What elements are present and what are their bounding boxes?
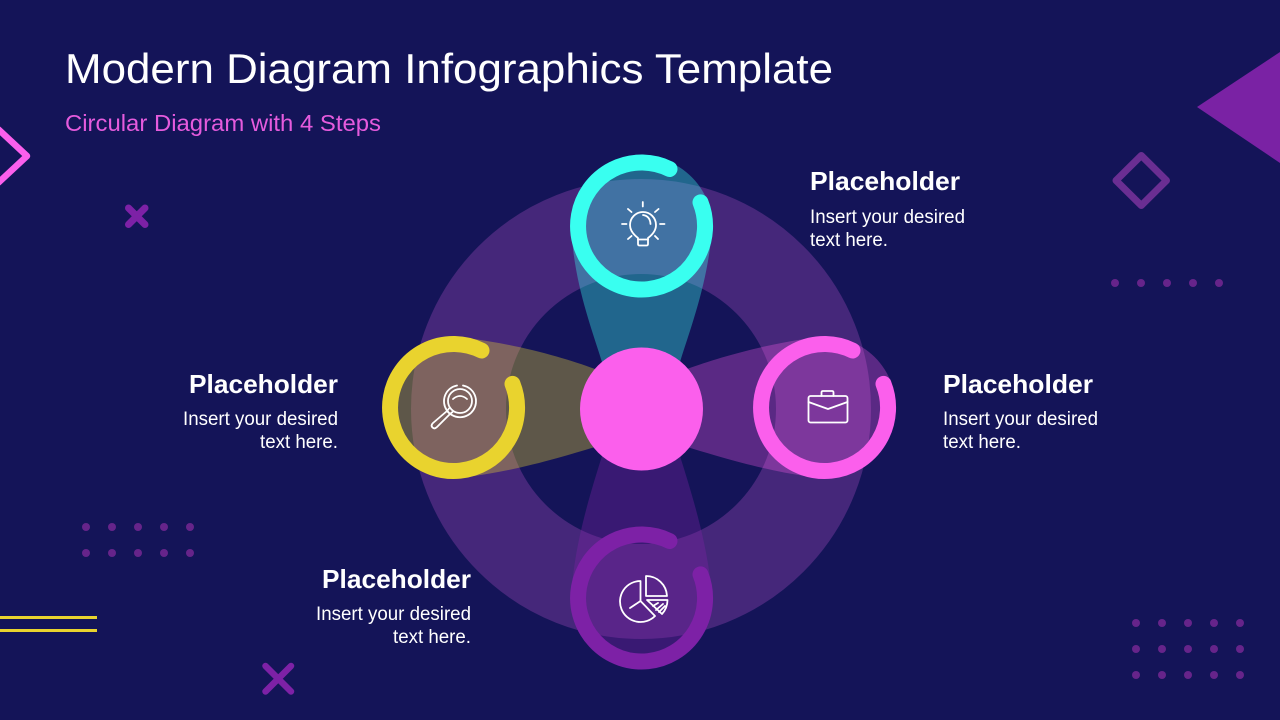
icon: briefcase xyxy=(808,391,848,422)
text block: top step: Insert your desired xyxy=(810,207,965,228)
text block: bottom step xyxy=(316,564,471,648)
text block: top step: text here. xyxy=(810,230,888,251)
decoration: dots left xyxy=(82,523,194,557)
decoration: small purple cross xyxy=(128,208,145,224)
petal: right pink xyxy=(687,336,896,478)
progress ring: purple xyxy=(578,535,705,662)
decoration: dots bottom right xyxy=(1132,619,1244,679)
text block: top step xyxy=(810,166,965,251)
text block: left step xyxy=(183,369,338,453)
decoration: dots top right xyxy=(1111,279,1223,287)
text block: right step: Placeholder xyxy=(943,369,1093,399)
decoration: purple triangle xyxy=(1197,52,1280,163)
decoration: outlined diamond xyxy=(1116,156,1166,206)
progress ring: teal xyxy=(578,163,705,290)
text block: left step: Insert your desired xyxy=(183,409,338,430)
progress ring: yellow xyxy=(390,344,517,471)
title: Modern Diagram Infographics Template xyxy=(65,45,833,92)
icon: light bulb xyxy=(622,202,664,246)
large translucent ring xyxy=(458,226,824,592)
centre pink circle xyxy=(580,348,703,470)
text block: left step: Placeholder xyxy=(189,369,338,399)
text block: left step: text here. xyxy=(260,432,338,453)
text block: bottom step: Insert your desired xyxy=(316,604,471,625)
decoration: yellow lines xyxy=(0,616,97,632)
decoration: large purple cross xyxy=(266,666,291,692)
text block: bottom step: Placeholder xyxy=(322,564,471,594)
text block: right step: text here. xyxy=(943,432,1021,453)
petal: left yellow xyxy=(382,336,595,478)
progress ring: pink xyxy=(761,344,888,471)
icon: pie chart xyxy=(620,576,668,622)
text block: top step: Placeholder xyxy=(810,166,960,196)
text block: right step: Insert your desired xyxy=(943,409,1098,430)
petal: top teal xyxy=(570,156,713,362)
circular diagram xyxy=(382,156,896,669)
petal: bottom purple xyxy=(570,456,712,669)
text block: bottom step: text here. xyxy=(393,627,471,648)
text block: right step xyxy=(943,369,1098,453)
decoration: pink chevron xyxy=(0,129,27,183)
icon: magnifying glass xyxy=(432,386,476,428)
subtitle: Circular Diagram with 4 Steps xyxy=(65,110,381,136)
